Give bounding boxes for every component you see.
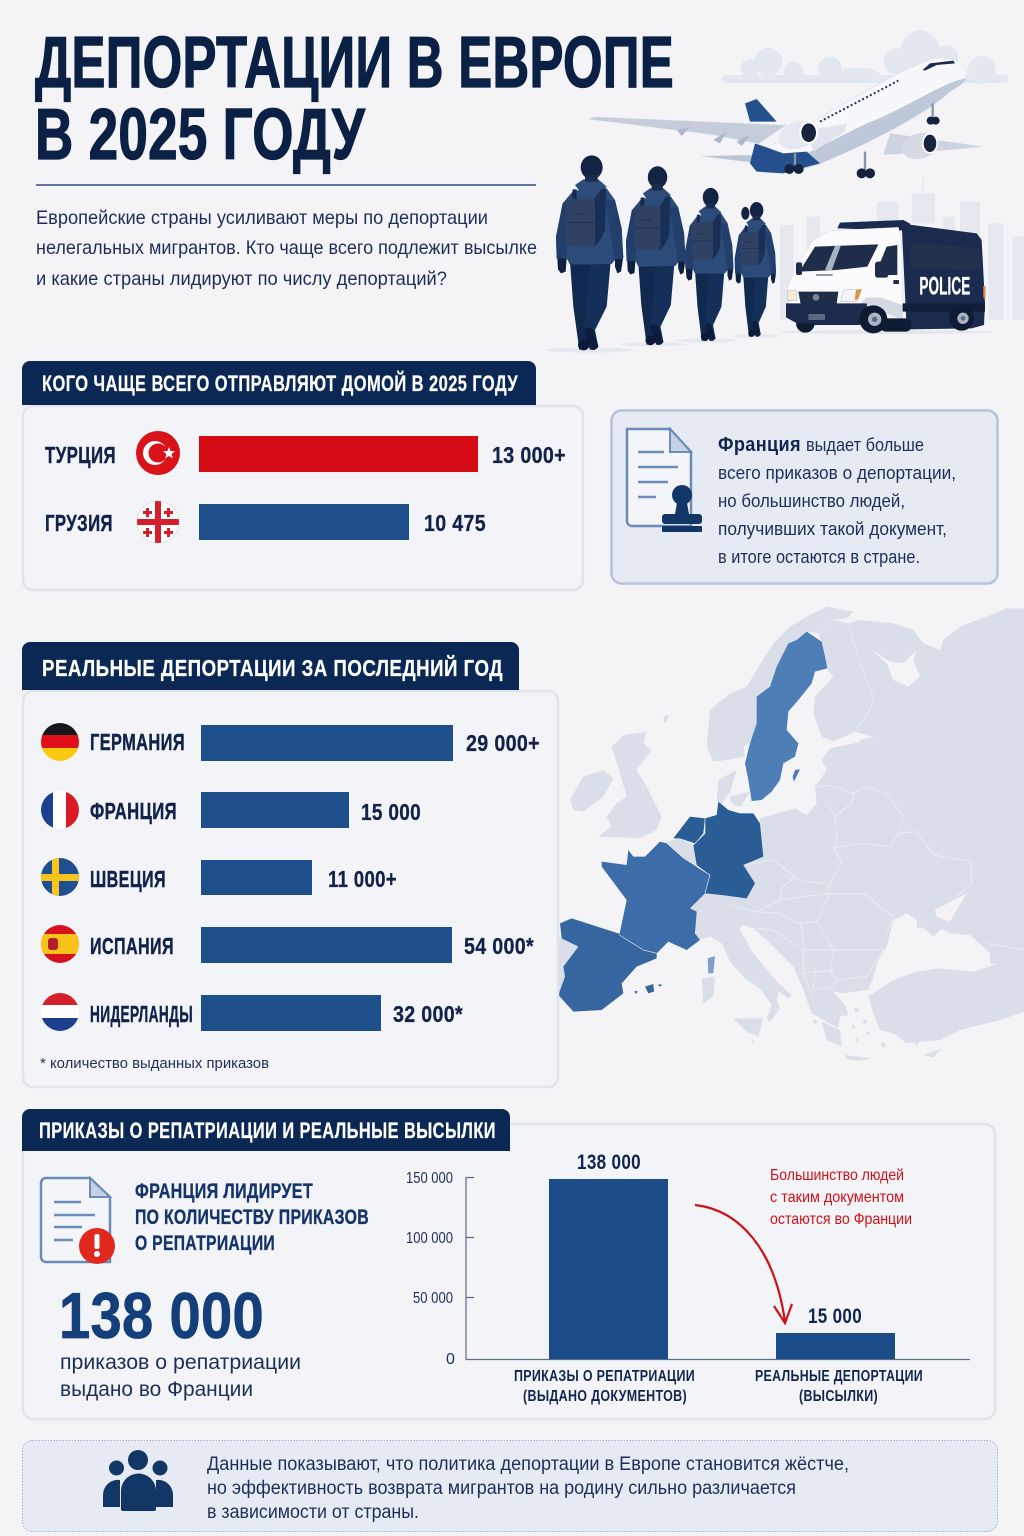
title: ДЕПОРТАЦИИ В ЕВРОПЕ (35, 23, 674, 103)
red annotation: остаются во Франции (770, 1211, 912, 1228)
police label: POLICE (919, 272, 970, 300)
bar chart: ПРИКАЗЫ О РЕПАТРИАЦИИ (514, 1368, 695, 1385)
big number caption: выдано во Франции (60, 1378, 253, 1401)
flag: spain (40, 924, 80, 964)
row: france (40, 790, 421, 830)
airplane (588, 58, 983, 178)
footnote: * количество выданных приказов (40, 1055, 269, 1072)
row: germany (40, 722, 540, 762)
row: turkey (45, 431, 566, 475)
flag: france (40, 790, 80, 830)
spain (558, 918, 657, 1012)
bar chart: 0 (446, 1351, 455, 1368)
balearic islands (634, 984, 663, 994)
section heading 2 (22, 642, 519, 690)
intro text: нелегальных мигрантов. Кто чаще всего подлежит высылке (36, 237, 537, 259)
france leads heading: ФРАНЦИЯ ЛИДИРУЕТ (135, 1180, 313, 1203)
title (35, 23, 674, 175)
germany (693, 802, 763, 898)
row: georgia: 10 475 (424, 510, 486, 536)
row: netherlands: НИДЕРЛАНДЫ (90, 1001, 193, 1027)
conclusion text (207, 1454, 849, 1523)
row: france: ФРАНЦИЯ (90, 798, 177, 824)
intro text: Европейские страны усиливают меры по депортации (36, 207, 488, 229)
person 3 (685, 188, 733, 341)
sky and plane (588, 31, 1024, 320)
bar chart: 100 000 (406, 1230, 453, 1247)
row: georgia (45, 500, 486, 544)
row: netherlands (40, 992, 463, 1032)
row: spain: ИСПАНИЯ (90, 933, 174, 959)
row: sweden: ШВЕЦИЯ (90, 866, 166, 892)
bar chart: 50 000 (413, 1290, 453, 1307)
callout text: всего приказов о депортации, (718, 462, 956, 483)
panel: real deportations (22, 642, 558, 1087)
conclusion text: но эффективность возврата мигрантов на родину сильно различается (207, 1478, 796, 1499)
red annotation (770, 1167, 912, 1228)
section heading 2: РЕАЛЬНЫЕ ДЕПОРТАЦИИ ЗА ПОСЛЕДНИЙ ГОД (42, 654, 503, 681)
france leads heading: ПО КОЛИЧЕСТВУ ПРИКАЗОВ (135, 1206, 369, 1229)
map of Europe (545, 607, 1024, 1061)
flag: germany (40, 722, 80, 762)
row: georgia: ГРУЗИЯ (45, 510, 113, 536)
arrow: orders to removals (695, 1205, 792, 1323)
conclusion text: в зависимости от страны. (207, 1502, 419, 1523)
panel: repatriation orders vs removals (22, 1109, 995, 1419)
netherlands (673, 817, 705, 843)
bar chart: (ВЫДАНО ДОКУМЕНТОВ) (523, 1388, 687, 1405)
icon: document with alert (41, 1178, 115, 1264)
row: germany: 29 000+ (466, 730, 540, 756)
intro text: и какие страны лидируют по числу депортаций? (36, 268, 447, 290)
section heading 3: ПРИКАЗЫ О РЕПАТРИАЦИИ И РЕАЛЬНЫЕ ВЫСЫЛКИ (39, 1118, 496, 1143)
icon: document with stamp (627, 429, 702, 532)
flag: sweden (40, 857, 80, 897)
big number caption (60, 1351, 301, 1401)
bar chart: (ВЫСЫЛКИ) (799, 1388, 878, 1405)
hero illustration: plane, people, police van (547, 31, 1024, 353)
flag: netherlands (40, 992, 80, 1032)
france (602, 842, 710, 953)
conclusion box (22, 1440, 998, 1532)
red annotation: Большинство людей (770, 1167, 904, 1184)
panel: who is sent home (22, 361, 583, 590)
row: sweden: 11 000+ (328, 866, 397, 892)
france leads heading (135, 1180, 369, 1255)
intro text (36, 207, 537, 290)
callout text: в итоге остаются в стране. (718, 546, 920, 567)
row: germany: ГЕРМАНИЯ (90, 729, 185, 755)
clouds (722, 31, 1008, 84)
person 1 (556, 155, 623, 350)
conclusion text: Данные показывают, что политика депортации в Европе становится жёстче, (207, 1454, 849, 1475)
police van (780, 220, 993, 334)
flag: turkey (136, 431, 180, 475)
callout text (718, 434, 956, 567)
callout text: Франция (718, 434, 801, 456)
section heading 3 (22, 1109, 510, 1151)
callout text: но большинство людей, (718, 490, 905, 511)
group of people walking (547, 155, 780, 353)
section heading 1: КОГО ЧАЩЕ ВСЕГО ОТПРАВЛЯЮТ ДОМОЙ В 2025 ГОДУ (42, 371, 518, 396)
callout: france (612, 410, 998, 584)
bar chart: 15 000 (808, 1305, 862, 1328)
bar chart (406, 1151, 970, 1405)
big number caption: приказов о репатриации (60, 1351, 301, 1374)
person 4 (735, 202, 776, 337)
row: spain: 54 000* (464, 933, 534, 959)
gotland (793, 769, 800, 782)
row: turkey: 13 000+ (492, 442, 566, 468)
callout text: получивших такой документ, (718, 518, 947, 539)
big number: 138 000 (59, 1279, 264, 1352)
row: france: 15 000 (361, 799, 421, 825)
section heading 1 (22, 361, 536, 405)
callout text: выдает больше (806, 434, 924, 455)
france leads heading: О РЕПАТРИАЦИИ (135, 1232, 275, 1255)
row: spain (40, 924, 534, 964)
icon: people (103, 1450, 173, 1511)
title: В 2025 ГОДУ (35, 95, 366, 175)
sweden (745, 632, 827, 801)
bar chart: 138 000 (577, 1151, 641, 1174)
bar chart: 150 000 (406, 1170, 453, 1187)
city skyline (780, 177, 1024, 320)
row: netherlands: 32 000* (393, 1001, 463, 1027)
red annotation: с таким документом (770, 1189, 904, 1206)
row: turkey: ТУРЦИЯ (45, 442, 116, 468)
row: sweden (40, 857, 397, 897)
flag: georgia (136, 500, 180, 544)
bar chart: РЕАЛЬНЫЕ ДЕПОРТАЦИИ (755, 1368, 923, 1385)
person 2 (626, 166, 686, 345)
